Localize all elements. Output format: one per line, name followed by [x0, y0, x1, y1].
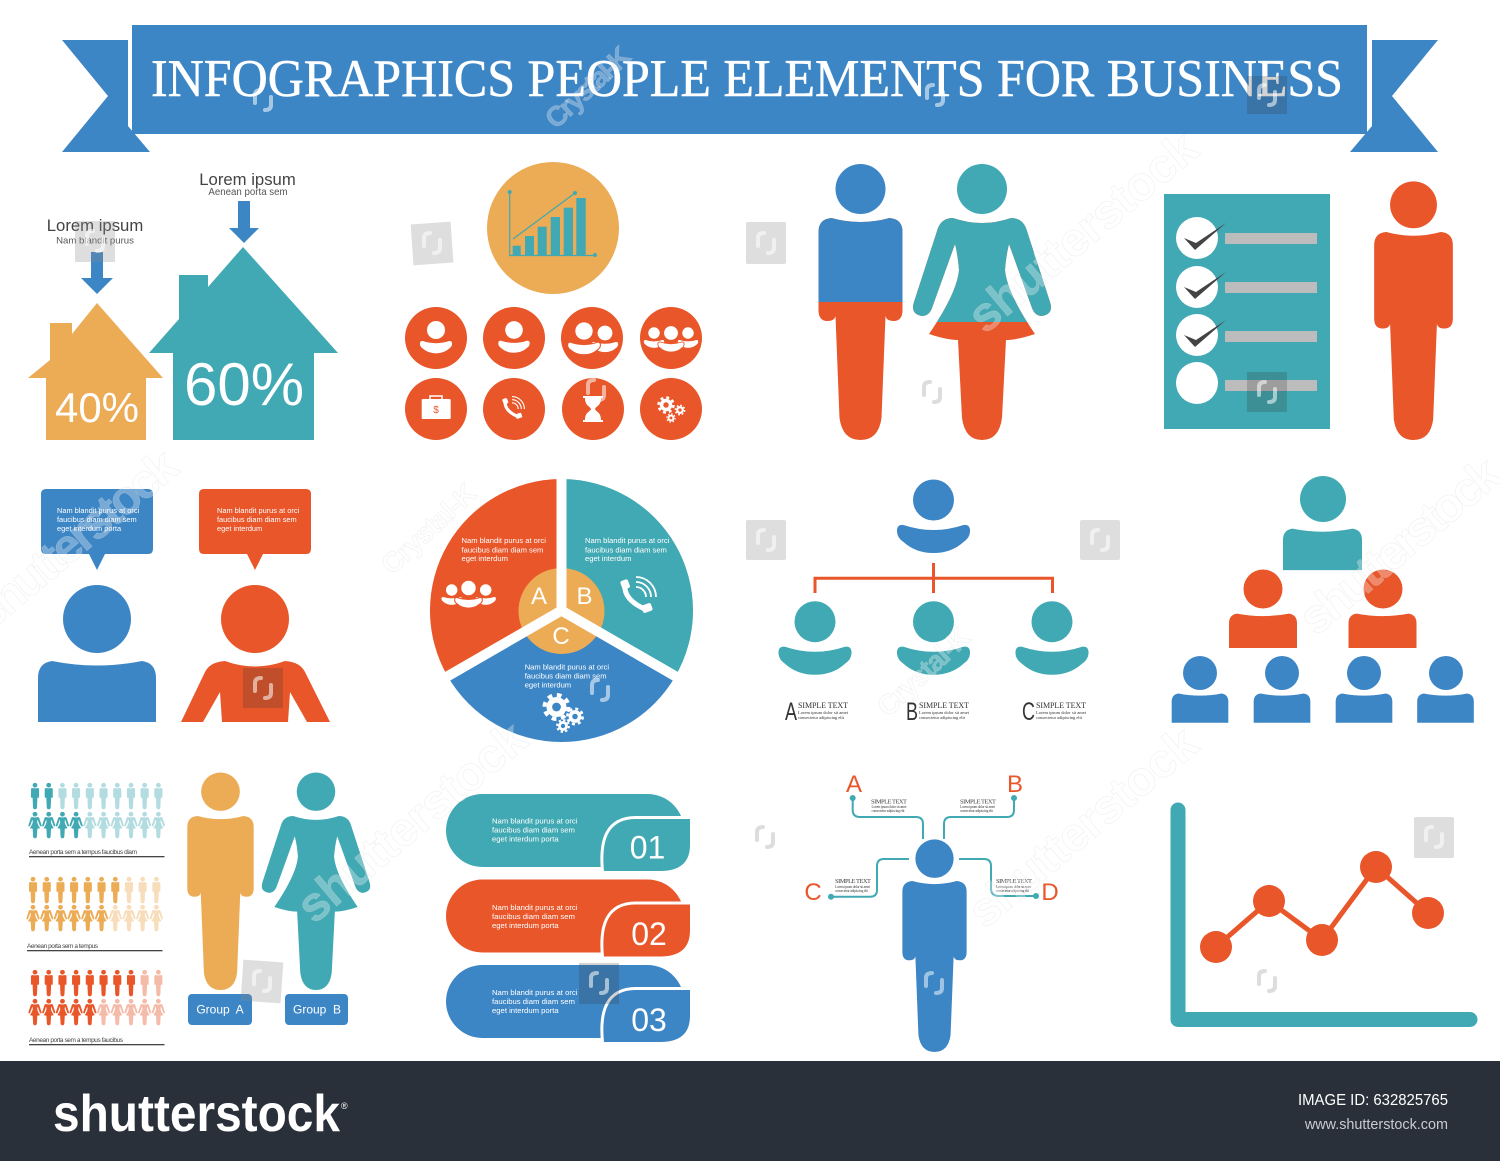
- letter D: D: [1041, 879, 1059, 906]
- pill 03: eget interdum porta: [492, 1006, 559, 1015]
- sector A text: [462, 536, 546, 563]
- top person: [897, 480, 970, 553]
- sector A text: faucibus diam diam sem: [462, 545, 543, 554]
- icon: gears: [544, 695, 583, 732]
- arrow to teal house: [229, 201, 259, 243]
- chart circle icon: [487, 162, 619, 294]
- panel: house comparison: [28, 170, 338, 440]
- red caption: [29, 1037, 164, 1045]
- label right: Lorem ipsum: [199, 170, 296, 189]
- letter B: B: [576, 583, 593, 610]
- caption C: [1022, 698, 1087, 726]
- person B: [897, 601, 970, 675]
- callout text D: [996, 878, 1032, 893]
- blue person 1: [1172, 656, 1228, 723]
- panel: checklist with person: [1164, 181, 1453, 440]
- panel: man and woman pair: [818, 164, 1051, 440]
- logo wordmark: shutterstock: [53, 1085, 340, 1143]
- panel: pie chart ABC: [430, 470, 693, 742]
- teal caption: [29, 849, 164, 857]
- label left: Lorem ipsum: [47, 216, 143, 235]
- callout text D: consectetur adipiscing elit: [996, 889, 1029, 893]
- Group B label: [285, 994, 348, 1025]
- icon: briefcase: [405, 378, 467, 440]
- sector C: [448, 610, 675, 742]
- icon: person 1: [405, 307, 467, 369]
- caption C: consectetur adipiscing elit: [1036, 715, 1083, 720]
- sector C text: [525, 662, 609, 690]
- callout text B: SIMPLE TEXT: [960, 798, 996, 806]
- sector B text: [585, 536, 670, 563]
- caption C: Lorem ipsum dolor sit amet: [1036, 710, 1087, 715]
- orange person bust: [181, 585, 330, 722]
- data points: [1200, 851, 1444, 963]
- axes: [1178, 810, 1470, 1020]
- line series: [1216, 867, 1428, 947]
- pill 02: eget interdum porta: [492, 921, 559, 930]
- callout text B: [960, 798, 996, 813]
- text: Crystal-K: [375, 477, 482, 580]
- letter A: A: [531, 583, 547, 610]
- callout text C: Lorem ipsum dolor sit amet: [835, 885, 870, 889]
- sector C text: eget interdum: [525, 680, 571, 690]
- letter C: C: [804, 879, 822, 906]
- caption C: SIMPLE TEXT: [1036, 701, 1086, 710]
- callout text A: Lorem ipsum dolor sit amet: [872, 805, 906, 809]
- teal caption: Aenean porta sem a tempus faucibus diam: [29, 849, 137, 856]
- red caption: Aenean porta sem a tempus faucibus: [29, 1037, 124, 1044]
- image id: IMAGE ID: 632825765: [1298, 1092, 1448, 1109]
- caption A: Lorem ipsum dolor sit amet: [798, 710, 849, 715]
- text: Crystal-K: [871, 621, 976, 722]
- title banner: [62, 25, 1438, 152]
- orange speech bubble: [199, 489, 311, 570]
- caption B: SIMPLE TEXT: [919, 701, 969, 710]
- pill 02: Nam blandit purus at orci: [492, 903, 578, 912]
- woman figure: [913, 164, 1051, 440]
- panel: person with ABCD callouts: [804, 771, 1059, 1052]
- check row 1: [1176, 217, 1317, 259]
- callout text A: [871, 798, 907, 813]
- teal women row: [28, 812, 165, 838]
- caption A: consectetur adipiscing elit: [798, 715, 845, 720]
- icon: group: [441, 580, 496, 608]
- callout text C: SIMPLE TEXT: [835, 878, 871, 885]
- icon: hourglass: [562, 378, 624, 440]
- blue person bust: [38, 585, 156, 722]
- icon: phone: [620, 577, 656, 613]
- callout dots: [828, 795, 1039, 900]
- orange women row: [26, 905, 163, 931]
- orange caption: Aenean porta sem a tempus: [27, 943, 99, 950]
- orange speech bubble: eget interdum: [217, 524, 262, 533]
- banner right ribbon tail: [1350, 40, 1438, 152]
- panel: speech bubbles people: [38, 489, 330, 722]
- value 60%: 60%: [184, 351, 304, 418]
- callout text C: [835, 878, 871, 893]
- pill 02: 02: [631, 916, 667, 952]
- caption A: A: [785, 698, 797, 726]
- icon: gears: [640, 378, 702, 440]
- banner main band: [132, 25, 1367, 134]
- panel: numbered pills: [446, 794, 690, 1042]
- check row 4: [1176, 362, 1317, 404]
- text: shutterstock: [958, 121, 1208, 343]
- checklist board: [1164, 194, 1330, 429]
- blue speech bubble: [41, 489, 153, 570]
- sector B text: faucibus diam diam sem: [585, 545, 667, 554]
- sublabel left: Nam blandit purus: [56, 236, 134, 246]
- pill 01: [446, 794, 690, 871]
- callout text C: consectetur adipiscing elit: [835, 889, 868, 893]
- Group B label: Group B: [293, 1002, 341, 1016]
- blue speech bubble: faucibus diam diam sem: [57, 515, 137, 524]
- person A: [778, 601, 852, 675]
- teal woman: [262, 772, 370, 990]
- top teal person: [1283, 476, 1362, 570]
- panel: line chart: [1178, 810, 1470, 1020]
- pill 01: Nam blandit purus at orci: [492, 816, 578, 826]
- blue person 2: [1254, 656, 1310, 723]
- value 40%: 40%: [55, 384, 139, 431]
- blue speech bubble: eget interdum porta: [57, 524, 122, 533]
- panel: chart and icon grid: [405, 162, 702, 440]
- teal house 60%: [149, 247, 338, 440]
- footer background: [0, 1061, 1500, 1161]
- text: shutterstock: [958, 716, 1208, 938]
- pill 02: faucibus diam diam sem: [492, 912, 575, 921]
- callout text B: consectetur adipiscing elit: [960, 809, 993, 813]
- letter C: C: [552, 623, 570, 650]
- orange person right: [1349, 570, 1416, 648]
- orange speech bubble: faucibus diam diam sem: [217, 515, 297, 524]
- caption B: B: [906, 698, 918, 726]
- person C: [1015, 601, 1089, 675]
- sector dividers: [436, 470, 687, 683]
- Group A label: Group A: [196, 1002, 244, 1016]
- caption B: [906, 698, 970, 726]
- teal men row: [31, 783, 162, 809]
- callout lines: [831, 798, 1036, 897]
- letter A: A: [846, 771, 862, 798]
- callout text A: consectetur adipiscing elit: [872, 809, 904, 813]
- callout text D: Lorem ipsum dolor sit amet: [996, 885, 1031, 889]
- text: Crystal-K: [539, 40, 637, 134]
- sector A text: eget interdum: [462, 554, 508, 563]
- sublabel right: Aenean porta sem: [208, 187, 288, 198]
- icon: briefcase: $: [433, 405, 439, 416]
- orange caption: [27, 943, 162, 951]
- title: INFOGRAPHICS PEOPLE ELEMENTS FOR BUSINESS: [151, 50, 1343, 108]
- pill 03: [446, 965, 690, 1042]
- icon: phone: [483, 378, 545, 440]
- pill 01: 01: [630, 830, 665, 866]
- pill 01: faucibus diam diam sem: [492, 826, 575, 834]
- arrow to orange house: [81, 252, 113, 294]
- Group A label: [188, 994, 252, 1025]
- panel: pictogram rows and groups: [26, 772, 370, 1045]
- sector C text: faucibus diam diam sem: [525, 672, 607, 680]
- pill 02: [446, 880, 690, 956]
- callout text A: SIMPLE TEXT: [871, 798, 907, 806]
- panel: org chart: [778, 480, 1089, 726]
- check row 2: [1176, 266, 1317, 308]
- blue speech bubble: Nam blandit purus at orci: [57, 506, 140, 515]
- connector: [815, 563, 1052, 593]
- sector A text: Nam blandit purus at orci: [462, 536, 546, 545]
- yellow man: [187, 772, 254, 990]
- icon: person 2: [483, 307, 545, 369]
- pill 03: 03: [631, 1002, 667, 1038]
- orange person left: [1229, 570, 1297, 648]
- blue person: [902, 839, 967, 1052]
- orange house 40%: [28, 303, 163, 440]
- banner left ribbon tail: [62, 40, 150, 152]
- caption B: consectetur adipiscing elit: [919, 715, 966, 720]
- red men row: [31, 970, 162, 996]
- icon: three people: [640, 307, 702, 369]
- man figure: [818, 164, 902, 440]
- orange person: [1374, 181, 1453, 440]
- sector B text: eget interdum: [585, 554, 631, 563]
- caption A: SIMPLE TEXT: [798, 701, 848, 710]
- orange men row: [29, 877, 160, 903]
- text: shutterstock: [287, 711, 537, 933]
- website: www.shutterstock.com: [1304, 1117, 1448, 1133]
- center circle: [518, 568, 604, 654]
- footer bar: [0, 1061, 1500, 1161]
- blue person 3: [1336, 656, 1392, 723]
- callout text D: SIMPLE TEXT: [996, 878, 1032, 885]
- sector B text: Nam blandit purus at orci: [585, 536, 670, 545]
- check row 3: [1176, 314, 1317, 356]
- callout text B: Lorem ipsum dolor sit amet: [960, 805, 995, 809]
- sector C text: Nam blandit purus at orci: [525, 662, 609, 672]
- pill 03: faucibus diam diam sem: [492, 997, 575, 1006]
- logo registered mark: ®: [341, 1101, 348, 1111]
- caption C: C: [1022, 698, 1035, 726]
- sector A: [430, 479, 562, 676]
- blue person 4: [1417, 656, 1474, 723]
- caption A: [785, 698, 849, 726]
- letter B: B: [1007, 771, 1023, 798]
- pill 01: eget interdum porta: [492, 834, 559, 844]
- pill 03: Nam blandit purus at orci: [492, 988, 578, 997]
- panel: people pyramid: [1172, 476, 1474, 723]
- sector B: [562, 479, 693, 676]
- icon: two people: [561, 307, 623, 369]
- orange speech bubble: Nam blandit purus at orci: [217, 506, 300, 515]
- red women row: [28, 999, 165, 1025]
- caption B: Lorem ipsum dolor sit amet: [919, 710, 970, 715]
